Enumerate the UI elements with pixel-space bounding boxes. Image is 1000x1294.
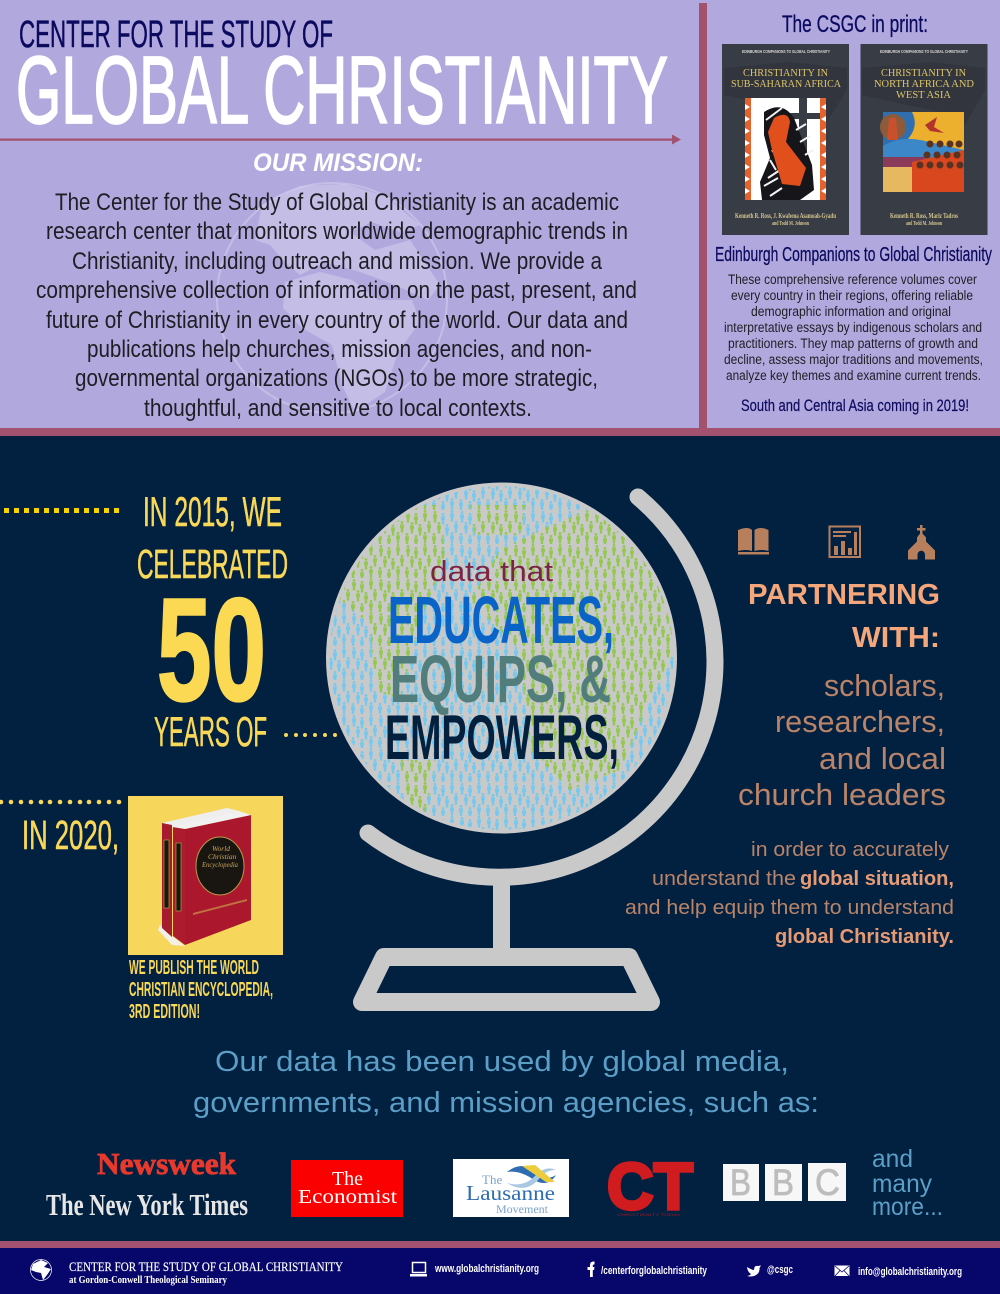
globe sphere made of people [320, 480, 685, 840]
mission text block: future of Christianity in every country of the world. Our data and [46, 307, 628, 334]
text: educates: EDUCATES, [388, 583, 614, 658]
heading: partnering: PARTNERING [748, 579, 940, 611]
logo: the lausanne movement: Lausanne [466, 1181, 555, 1205]
dotted line top [4, 508, 119, 513]
mission text block: publications help churches, mission agencies, and non- [87, 336, 592, 363]
icon: globe logo [30, 1260, 52, 1280]
horizontal band above footer [0, 1241, 1000, 1248]
logo: new york times: The New York Times [46, 1187, 248, 1222]
book cover: north africa and west asia: Kenneth R. Ross, Mariz Tadros [890, 212, 958, 220]
text: and many more [872, 1145, 943, 1221]
book cover: sub-saharan africa: and Todd M. Johnson [772, 220, 809, 227]
text: 50: 50 [157, 568, 266, 731]
text block: volumes description: practitioners. They map patterns of growth and [728, 336, 978, 351]
text block: purpose: global situation, [800, 867, 954, 890]
panel: footer contact bar [30, 1260, 962, 1286]
text: and many more: many [872, 1170, 932, 1198]
panel: data used by [46, 1046, 943, 1223]
text: empowers: EMPOWERS, [385, 703, 619, 773]
vertical divider [699, 3, 707, 430]
heading: data use statement: governments, and mission agencies, such as: [193, 1087, 819, 1119]
book cover: north africa and west asia: WEST ASIA [896, 89, 951, 101]
heading: data use statement [193, 1046, 819, 1119]
mission text block: research center that monitors worldwide demographic trends in [46, 218, 628, 245]
heading: center for the study of: CENTER FOR THE STUDY OF [19, 14, 333, 56]
logo: newsweek: Newsweek [97, 1146, 237, 1181]
book cover: north africa and west asia: CHRISTIANITY IN [881, 67, 966, 79]
dotted line [0, 800, 121, 804]
list: partner types: church leaders [738, 777, 946, 812]
logo: christianity today: CT [607, 1149, 693, 1223]
text block: purpose: global Christianity. [775, 925, 954, 948]
caption: we publish [129, 957, 273, 1023]
icon: world christian encyclopedia volumes: Christian [208, 852, 237, 861]
book cover: north africa and west asia [860, 44, 988, 235]
book cover: north africa and west asia: and Todd M. Johnson [906, 221, 942, 227]
panel: 50 years [4, 488, 337, 755]
mission text block: thoughtful, and sensitive to local contexts. [144, 395, 532, 422]
panel: header background [0, 0, 1000, 432]
logo: bbc [723, 1162, 846, 1203]
text: in 2015 we: IN 2015, WE [143, 488, 282, 535]
heading: with: WITH: [852, 622, 940, 654]
mission text block: The Center for the Study of Global Christianity is an academic [55, 189, 619, 216]
book cover: sub-saharan africa [722, 44, 849, 235]
text block: volumes description [724, 272, 983, 383]
text block: purpose: in order to accurately [751, 838, 950, 861]
icon: world christian encyclopedia volumes: Encyclopedia [201, 860, 238, 869]
book cover: north africa and west asia: NORTH AFRICA AND [874, 78, 974, 90]
text block: purpose: and help equip them to understand [625, 896, 954, 919]
text block: volumes description: every country in their regions, offering reliable [731, 288, 973, 303]
list: partner types: researchers, [775, 704, 945, 739]
mission text block: governmental organizations (NGOs) to be more strategic, [75, 365, 598, 392]
text: website: www.globalchristianity.org [434, 1263, 539, 1275]
text: years of: YEARS OF [154, 708, 267, 755]
logo: bbc: B [772, 1162, 794, 1203]
text: in 2020: IN 2020, [22, 812, 119, 858]
text: celebrated: CELEBRATED [137, 541, 288, 587]
icon: twitter [747, 1266, 761, 1276]
yellow book tile [128, 796, 283, 955]
logo: bbc: B [730, 1162, 751, 1203]
logo: bbc: C [815, 1162, 840, 1203]
horizontal band under header [0, 428, 1000, 436]
logo: the lausanne movement: The [482, 1172, 502, 1187]
caption: we publish: CHRISTIAN ENCYCLOPEDIA, [129, 979, 273, 1001]
book cover: sub-saharan africa: Kenneth R. Ross, J. Kwabena Asamoah-Gyadu [735, 212, 836, 220]
icon: mail [834, 1266, 850, 1276]
text: twitter handle: @csgc [767, 1264, 793, 1276]
icon: facebook [588, 1261, 594, 1277]
text block: volumes description: demographic information and original [751, 304, 951, 319]
book cover: north africa and west asia: EDINBURGH COMPANIONS TO GLOBAL CHRISTIANITY [880, 49, 968, 54]
faint globe behind mission [217, 183, 447, 413]
text block: purpose [625, 838, 954, 948]
mission text block: Christianity, including outreach and mission. We provide a [72, 248, 603, 275]
logo: christianity today: CHRISTIANITY TODAY [617, 1213, 682, 1217]
dotted line to globe [284, 733, 337, 737]
icon: church [908, 525, 935, 560]
panel: partnering with [625, 525, 954, 948]
chart: globe illustration [320, 480, 715, 1002]
heading: the CSGC in print: The CSGC in print: [782, 11, 928, 38]
logo: the economist [291, 1160, 403, 1217]
footer background [0, 1246, 1000, 1294]
text: and many more: more... [872, 1193, 943, 1221]
list: partner types: scholars, [824, 668, 945, 703]
logo: the economist: The [332, 1168, 363, 1190]
text: email: info@globalchristianity.org [858, 1266, 962, 1278]
caption: we publish: 3RD EDITION! [129, 1001, 200, 1023]
book cover: sub-saharan africa: SUB-SAHARAN AFRICA [731, 78, 841, 90]
logo: the economist: Economist [298, 1186, 398, 1208]
arrow under title [0, 134, 681, 144]
icon: world christian encyclopedia volumes: World [212, 844, 230, 853]
icon: laptop [410, 1262, 427, 1276]
mission text block: comprehensive collection of information on the past, present, and [36, 277, 637, 304]
list: partner types: and local [819, 741, 946, 776]
book cover: sub-saharan africa: EDINBURGH COMPANIONS TO GLOBAL CHRISTIANITY [742, 49, 830, 54]
caption: we publish: WE PUBLISH THE WORLD [129, 957, 259, 979]
panel: lower navy background [0, 434, 1000, 1244]
text: equips: EQUIPS, & [390, 642, 611, 717]
text: facebook handle: /centerforglobalchristianity [601, 1265, 708, 1277]
heading: our mission: OUR MISSION: [253, 149, 423, 177]
logo: the lausanne movement [453, 1159, 569, 1217]
text: seminary: at Gordon-Conwell Theological Seminary [69, 1275, 228, 1286]
logo: the lausanne movement: Movement [496, 1202, 549, 1216]
globe stand [362, 497, 715, 1002]
icon: bar chart [830, 526, 860, 557]
icon: world christian encyclopedia volumes [158, 808, 251, 946]
mission text block [36, 189, 637, 422]
text: data that: data that [430, 556, 553, 588]
heading: data use statement: Our data has been used by global media, [215, 1046, 789, 1078]
text: and many more: and [872, 1145, 913, 1173]
text: center name: CENTER FOR THE STUDY OF GLOBAL CHRISTIANITY [69, 1260, 343, 1274]
icon: open book [738, 528, 769, 554]
panel: title and mission [0, 14, 681, 422]
list: partner types [738, 668, 946, 812]
panel: the CSGC in print [715, 11, 992, 415]
book cover: sub-saharan africa: CHRISTIANITY IN [743, 67, 828, 79]
text block: purpose: understand the [652, 867, 796, 890]
panel: encyclopedia [0, 796, 283, 1023]
